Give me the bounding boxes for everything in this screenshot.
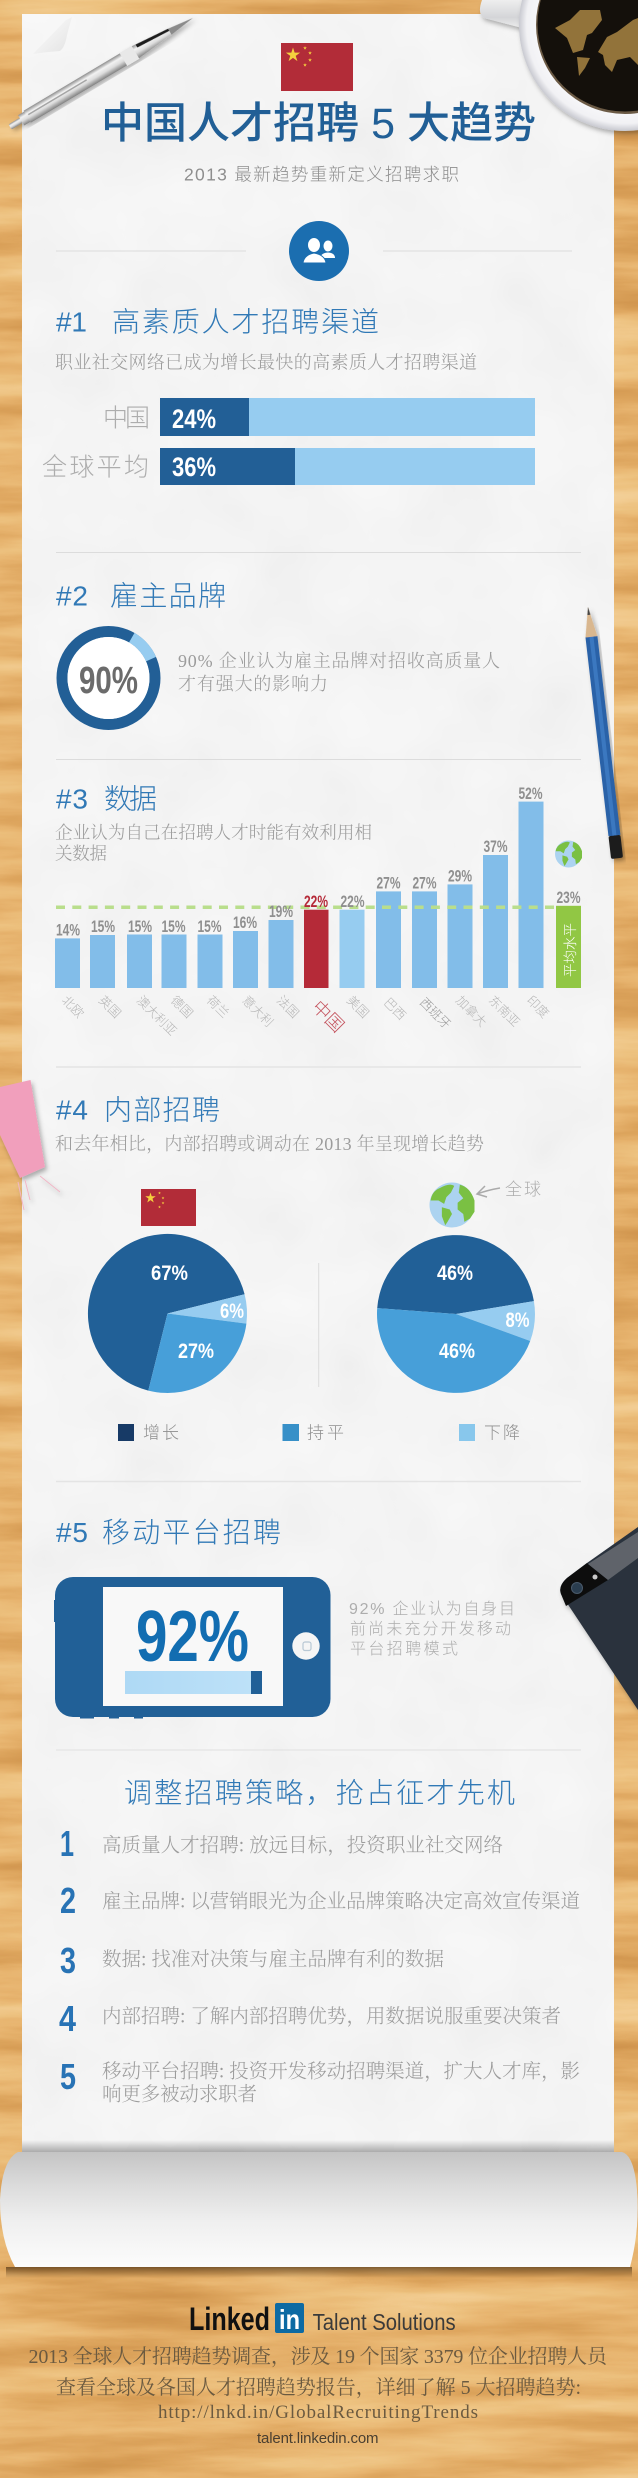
bar chart: data by country: 意大利 bbox=[239, 993, 277, 1030]
bar chart: data by country: 15% bbox=[198, 918, 222, 936]
donut chart: 90%: 90% bbox=[79, 660, 138, 702]
title: 中国人才招聘 5 大趋势 bbox=[101, 100, 536, 148]
decorative eraser bbox=[0, 1080, 60, 1210]
heading #5: 移动平台招聘 bbox=[102, 1517, 281, 1548]
list: five recommendations bbox=[59, 1823, 580, 2105]
pie chart: China bbox=[88, 1234, 247, 1393]
heading #2 bbox=[56, 581, 226, 612]
bar chart: data by country: 法国 bbox=[274, 993, 301, 1021]
decorative pencil bbox=[582, 606, 623, 859]
heading #3 bbox=[56, 784, 157, 815]
footer text: http://lnkd.in/GlobalRecruitingTrends bbox=[158, 2402, 478, 2423]
footer text bbox=[28, 2345, 609, 2447]
heading #3: 数据 bbox=[104, 784, 157, 815]
text: #3 description: 企业认为自己在招聘人才时能有效利用相 bbox=[55, 823, 372, 843]
donut chart: 90% bbox=[62, 632, 155, 724]
text: #1 description: 职业社交网络已成为增长最快的高素质人才招聘渠道 bbox=[55, 352, 477, 372]
coffee cup bbox=[480, 0, 638, 131]
heading #5: #5 bbox=[56, 1517, 88, 1548]
heading #2: #2 bbox=[56, 581, 88, 612]
text: #3 description: 关数据 bbox=[55, 844, 107, 864]
heading #4: #4 bbox=[56, 1095, 88, 1126]
bar chart: data by country: 16% bbox=[233, 914, 257, 932]
list: five recommendations: 4 bbox=[59, 1998, 76, 2039]
logo: LinkedIn Talent Solutions: Linked bbox=[189, 2301, 270, 2337]
bar chart: talent channel: 24% bbox=[172, 404, 216, 434]
legend: 持平 bbox=[307, 1424, 344, 1442]
heading #2: 雇主品牌 bbox=[110, 581, 226, 612]
text: #2 description bbox=[178, 651, 500, 694]
pie chart: global bbox=[377, 1235, 535, 1393]
heading #1: 高素质人才招聘渠道 bbox=[112, 307, 379, 338]
bar chart: data by country: 27% bbox=[376, 874, 401, 892]
icon: large globe bbox=[430, 1182, 474, 1228]
pie chart: global: 46% bbox=[437, 1262, 473, 1285]
legend: 增长 bbox=[143, 1424, 179, 1442]
bar chart: data by country: 23% bbox=[556, 889, 581, 907]
bar chart: data by country: 西班牙 bbox=[417, 995, 453, 1032]
bar chart: data by country: 荷兰 bbox=[204, 993, 231, 1021]
list: five recommendations: 数据: 找准对决策与雇主品牌有利的数据 bbox=[102, 1948, 444, 1970]
bar chart: data by country: 中国 bbox=[308, 997, 348, 1036]
bar chart: data by country: 15% bbox=[91, 918, 115, 936]
text: #4 description: 和去年相比，内部招聘或调动在 2013 年呈现增长趋势 bbox=[55, 1134, 484, 1154]
bar chart: data by country: 德国 bbox=[168, 993, 195, 1021]
footer text: talent.linkedin.com bbox=[257, 2430, 378, 2447]
bar chart: data by country: 22% bbox=[304, 893, 328, 911]
heading: strategy: 调整招聘策略，抢占征才先机 bbox=[124, 1778, 515, 1809]
bar chart: data by country: 29% bbox=[448, 868, 472, 886]
bar chart: talent channel: 中国 bbox=[103, 404, 150, 432]
bar chart: data by country: 英国 bbox=[96, 993, 123, 1021]
text: #3 description bbox=[55, 823, 372, 864]
icon: phone with 92% bbox=[54, 1577, 330, 1718]
text: #2 description: 才有强大的影响力 bbox=[178, 674, 328, 694]
bar chart: data by country: 52% bbox=[518, 785, 543, 803]
bar chart: data by country: 平均水平 bbox=[563, 923, 578, 977]
bar chart: data by country: 东南亚 bbox=[486, 993, 522, 1030]
bar chart: data by country: 北欧 bbox=[59, 993, 86, 1021]
list: five recommendations: 内部招聘: 了解内部招聘优势，用数据说服重要决策者 bbox=[102, 2005, 561, 2027]
flag: China small bbox=[141, 1189, 196, 1226]
pie chart: global: 46% bbox=[439, 1340, 475, 1363]
logo: LinkedIn Talent Solutions: Talent Solutions bbox=[313, 2309, 456, 2335]
legend: 下降 bbox=[484, 1424, 520, 1442]
text: #2 description: 90% 企业认为雇主品牌对招收高质量人 bbox=[178, 651, 500, 671]
heading #4: 内部招聘 bbox=[104, 1095, 220, 1126]
flag: China bbox=[281, 43, 353, 91]
bar chart: data by country: 美国 bbox=[344, 993, 371, 1021]
bar chart: data by country: 巴西 bbox=[381, 995, 408, 1023]
text: #5 description: 前尚未充分开发移动 bbox=[350, 1620, 511, 1638]
decorative smartphone photo bbox=[560, 1527, 638, 1710]
bar chart: data by country: 22% bbox=[340, 893, 365, 911]
icon: small globe bbox=[555, 840, 582, 868]
list: five recommendations: 响更多被动求职者 bbox=[102, 2083, 257, 2105]
bar chart: data by country bbox=[55, 785, 581, 1038]
heading #3: #3 bbox=[56, 784, 88, 815]
text: #5 description bbox=[349, 1600, 515, 1658]
pie chart: global: 8% bbox=[506, 1309, 530, 1332]
footer text: 2013 全球人才招聘趋势调查，涉及 19 个国家 3379 位企业招聘人员 bbox=[28, 2345, 609, 2368]
icon: people circle with side rules bbox=[56, 221, 572, 281]
bar chart: data by country: 19% bbox=[269, 903, 293, 921]
footer text: 查看全球及各国人才招聘趋势报告，详细了解 5 大招聘趋势: bbox=[56, 2376, 581, 2399]
bar chart: talent channel bbox=[42, 398, 535, 485]
bar chart: data by country: 15% bbox=[162, 918, 186, 936]
pie chart: China: 6% bbox=[220, 1300, 244, 1323]
list: five recommendations: 5 bbox=[60, 2056, 76, 2097]
heading #1: #1 bbox=[56, 307, 87, 338]
decorative pen bbox=[6, 11, 197, 133]
logo: LinkedIn Talent Solutions bbox=[189, 2301, 456, 2337]
bar chart: data by country: 15% bbox=[128, 918, 152, 936]
paper roll bbox=[0, 2140, 638, 2278]
bar chart: data by country: 澳大利亚 bbox=[134, 993, 179, 1038]
list: five recommendations: 雇主品牌: 以营销眼光为企业品牌策略决定高效宣传渠道 bbox=[102, 1890, 580, 1912]
text: #5 description: 92% 企业认为自身目 bbox=[349, 1600, 515, 1618]
list: five recommendations: 2 bbox=[60, 1880, 76, 1921]
arrow with global label: 全球 bbox=[505, 1180, 541, 1199]
icon: phone with 92%: 92% bbox=[136, 1597, 249, 1677]
list: five recommendations: 移动平台招聘: 投资开发移动招聘渠道，扩大人才库，影 bbox=[102, 2060, 580, 2082]
bar chart: data by country: 印度 bbox=[524, 993, 551, 1021]
pie chart: China: 67% bbox=[151, 1262, 188, 1285]
logo: LinkedIn Talent Solutions: in bbox=[279, 2304, 300, 2335]
list: five recommendations: 高质量人才招聘: 放远目标，投资职业社交网络 bbox=[102, 1834, 503, 1856]
text: #5 description: 平台招聘模式 bbox=[350, 1640, 458, 1658]
list: five recommendations: 1 bbox=[60, 1823, 74, 1864]
pie chart: China: 27% bbox=[178, 1340, 214, 1363]
bar chart: talent channel: 全球平均 bbox=[42, 454, 149, 482]
legend bbox=[118, 1424, 520, 1442]
bar chart: data by country: 加拿大 bbox=[453, 993, 490, 1030]
list: five recommendations: 3 bbox=[60, 1940, 76, 1981]
arrow with global label bbox=[477, 1180, 541, 1199]
subtitle: 2013 最新趋势重新定义招聘求职 bbox=[184, 165, 459, 185]
bar chart: data by country: 37% bbox=[484, 838, 508, 856]
bar chart: data by country: 14% bbox=[56, 922, 80, 940]
bar chart: data by country: 27% bbox=[412, 874, 437, 892]
bar chart: talent channel: 36% bbox=[172, 452, 216, 482]
